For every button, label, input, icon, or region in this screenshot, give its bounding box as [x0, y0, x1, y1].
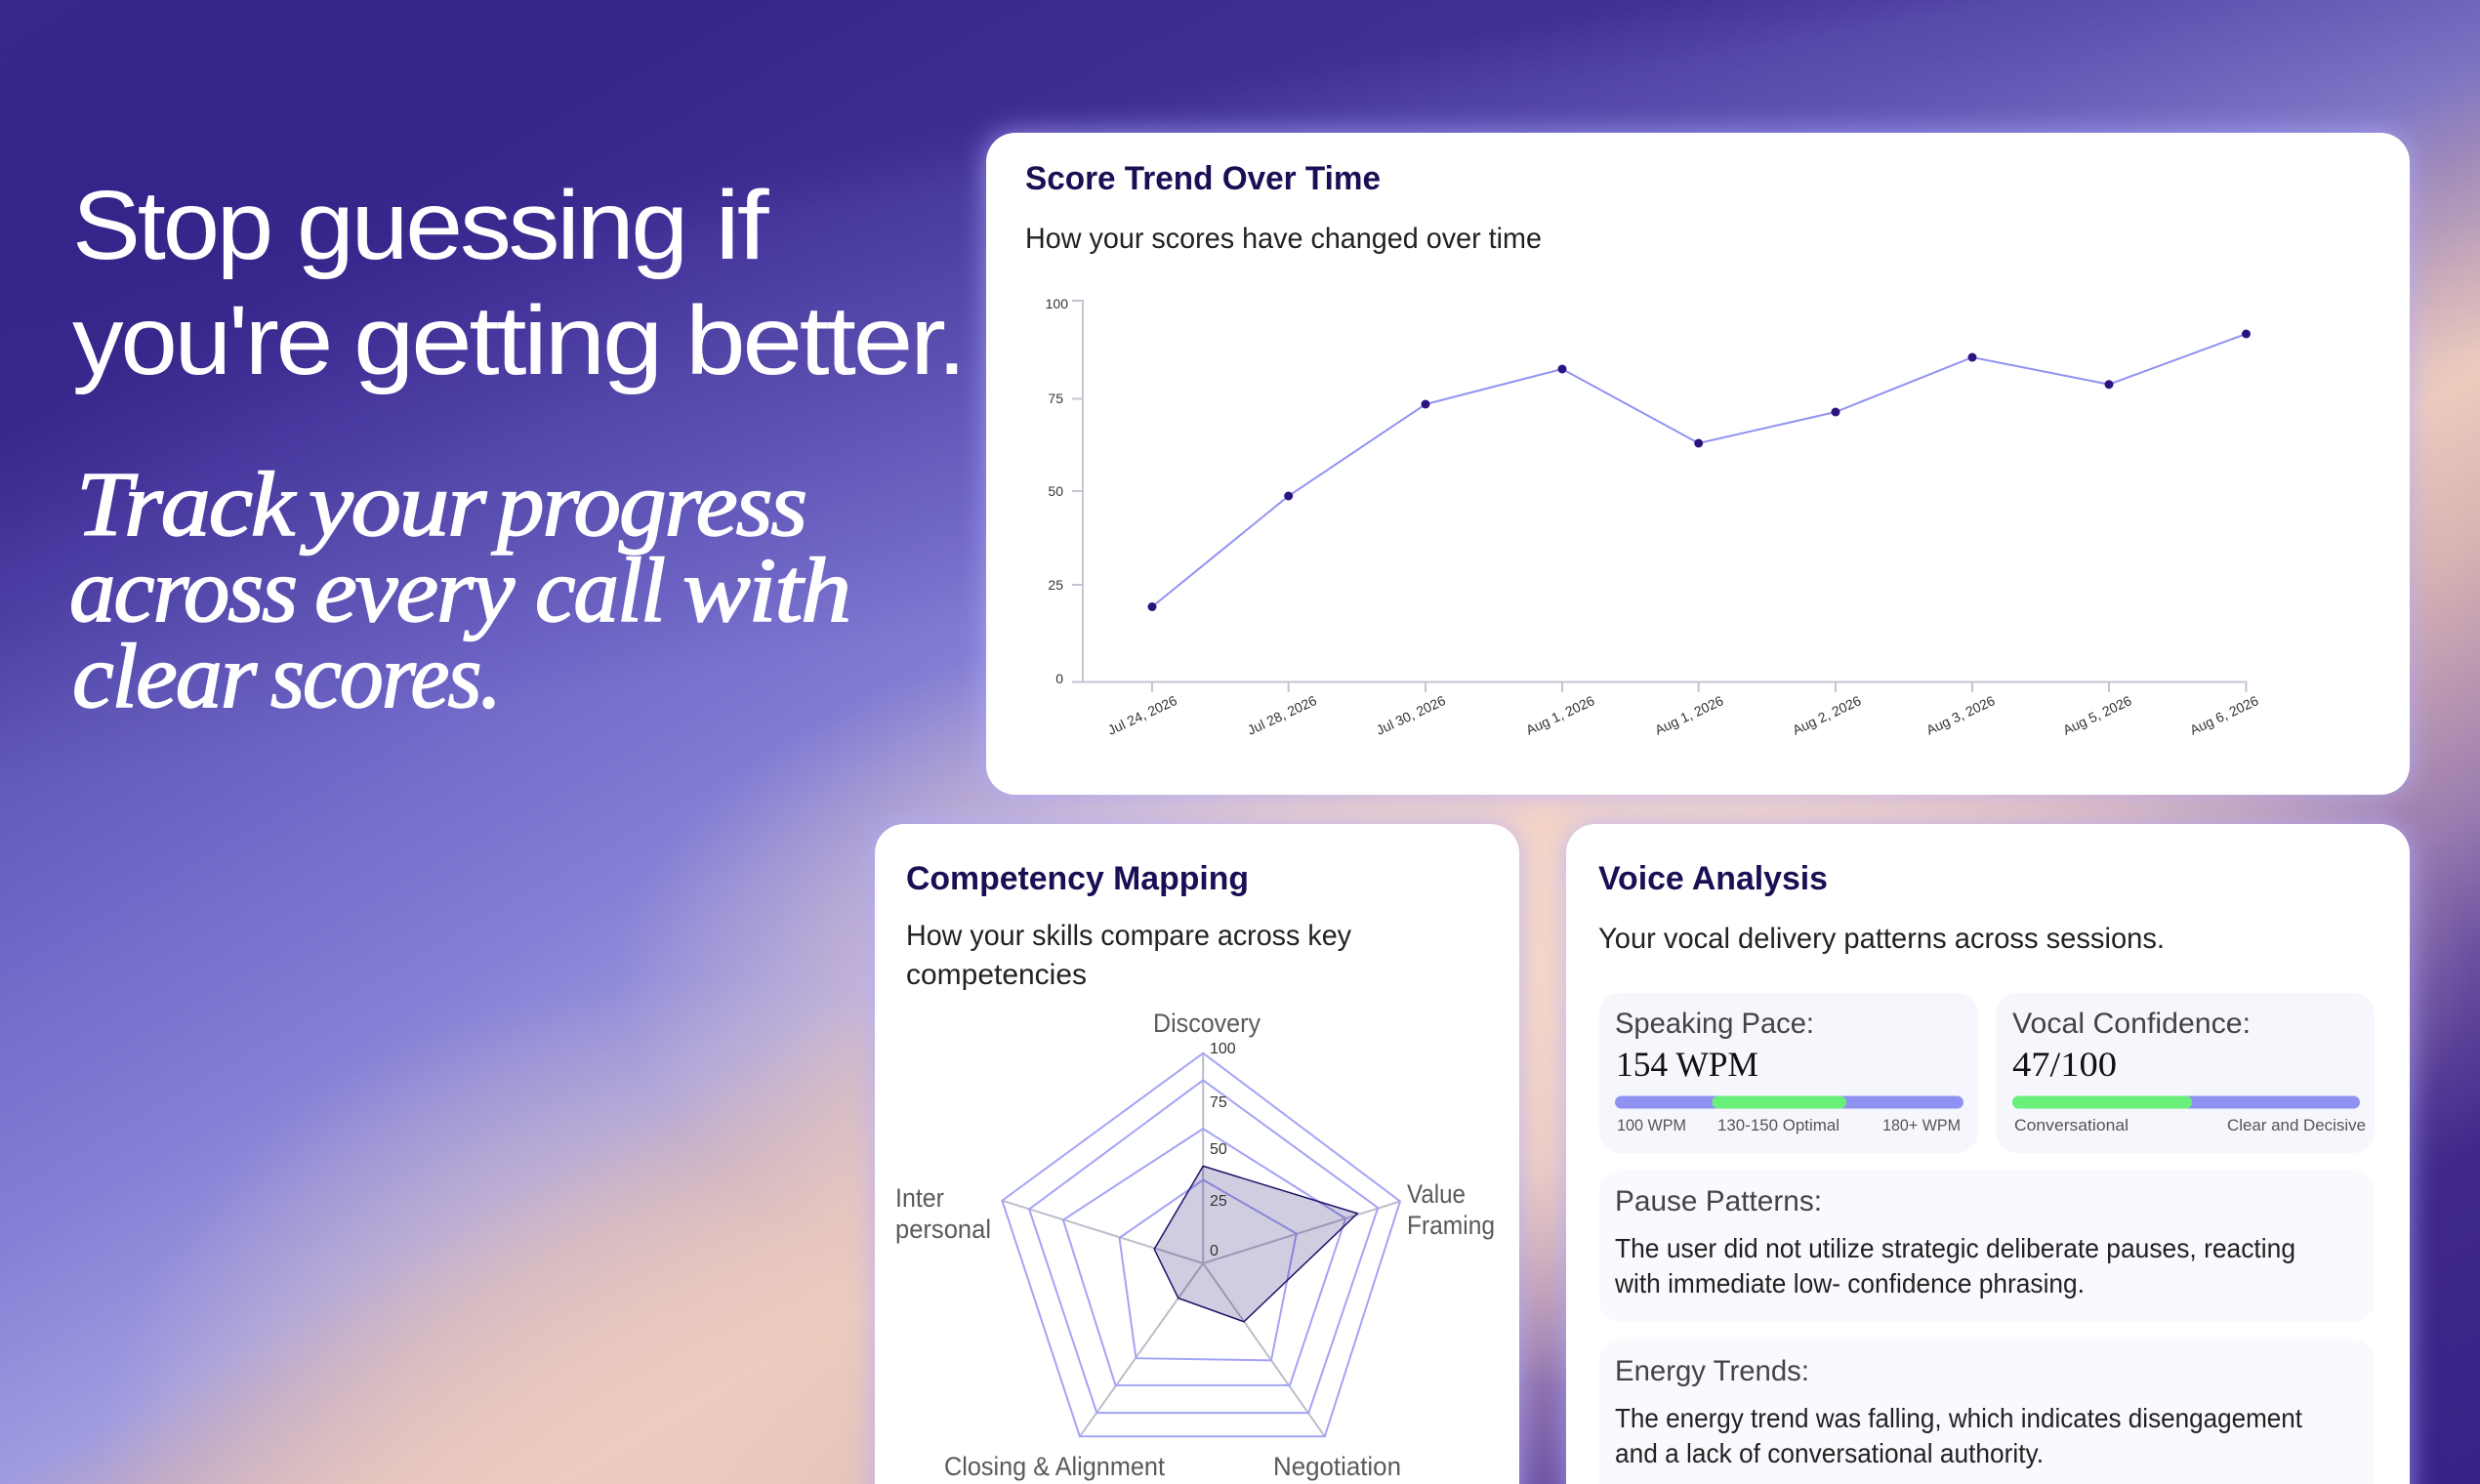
- line chart: Jul 28, 2026: [1245, 692, 1319, 738]
- hero subheading: every: [314, 540, 515, 641]
- energy trends tile: The energy trend was falling, which indicates disengagement: [1615, 1403, 2302, 1433]
- pause patterns tile: with immediate low- confidence phrasing.: [1614, 1268, 2085, 1298]
- hero subheading: [69, 454, 849, 727]
- speaking pace tile: [1599, 993, 1978, 1153]
- radar chart: [895, 1009, 1495, 1481]
- line chart: Aug 3, 2026: [1923, 692, 1998, 738]
- competency heading: Competency Mapping: [906, 860, 1249, 897]
- radar chart: Closing & Alignment: [944, 1452, 1165, 1481]
- score trend heading: Score Trend Over Time: [1025, 160, 1381, 197]
- speaking pace tile: 154 WPM: [1616, 1045, 1758, 1084]
- line chart: 75: [1048, 391, 1063, 406]
- line chart: 25: [1048, 577, 1063, 593]
- line chart: 50: [1048, 483, 1063, 499]
- hero subheading: across: [69, 540, 296, 641]
- panel: competency mapping: [875, 824, 1519, 1484]
- pause patterns tile: [1599, 1171, 2375, 1322]
- energy trends tile: [1599, 1340, 2375, 1484]
- voice heading: Voice Analysis: [1598, 860, 1828, 897]
- speaking pace tile: 100 WPM: [1617, 1116, 1686, 1134]
- line chart: Jul 30, 2026: [1374, 692, 1448, 738]
- radar chart: 25: [1210, 1193, 1227, 1210]
- hero headline: guessing: [297, 171, 685, 280]
- hero subheading: your: [300, 454, 487, 556]
- radar chart: Inter: [895, 1183, 944, 1213]
- hero headline: getting: [353, 286, 660, 395]
- radar chart: Discovery: [1153, 1009, 1261, 1038]
- vocal confidence tile: 47/100: [2012, 1045, 2117, 1084]
- vocal confidence tile: Conversational: [2014, 1116, 2129, 1134]
- hero headline: better.: [685, 286, 964, 395]
- radar chart: 75: [1210, 1094, 1227, 1111]
- score trend subtitle: How your scores have changed over time: [1025, 223, 1542, 255]
- competency subtitle: competencies: [906, 959, 1087, 991]
- hero subheading: scores.: [270, 626, 500, 727]
- line chart: Jul 24, 2026: [1105, 692, 1179, 738]
- hero subheading: with: [682, 540, 849, 641]
- speaking pace tile: 130-150 Optimal: [1717, 1116, 1839, 1134]
- line chart: 0: [1055, 671, 1063, 686]
- hero subheading: progress: [491, 454, 806, 556]
- radar chart: Framing: [1407, 1211, 1495, 1240]
- pause patterns tile: Pause Patterns:: [1615, 1185, 1822, 1217]
- line chart: Aug 1, 2026: [1652, 692, 1726, 738]
- speaking pace tile: Speaking Pace:: [1615, 1008, 1814, 1040]
- voice subtitle: Your vocal delivery patterns across sessions.: [1598, 923, 2165, 955]
- hero headline: Stop: [72, 171, 270, 280]
- line chart: Aug 5, 2026: [2060, 692, 2134, 738]
- radar chart: 100: [1210, 1041, 1236, 1057]
- radar chart: Value: [1407, 1179, 1466, 1209]
- hero headline: if: [715, 171, 769, 280]
- line chart: Aug 2, 2026: [1790, 692, 1864, 738]
- hero headline: [72, 171, 964, 395]
- line chart: 100: [1046, 296, 1068, 311]
- hero subheading: Track: [76, 454, 298, 556]
- energy trends tile: Energy Trends:: [1615, 1355, 1809, 1387]
- vocal confidence tile: [1996, 993, 2375, 1153]
- radar chart: Negotiation: [1273, 1452, 1401, 1481]
- hero subheading: clear: [72, 626, 257, 727]
- pause patterns tile: The user did not utilize strategic deliberate pauses, reacting: [1615, 1233, 2295, 1263]
- line chart: [1046, 296, 2261, 738]
- hero subheading: call: [535, 540, 665, 641]
- competency subtitle: [906, 920, 1351, 991]
- line chart: Aug 6, 2026: [2187, 692, 2261, 738]
- vocal confidence tile: Clear and Decisive: [2227, 1116, 2366, 1134]
- hero headline: you're: [72, 286, 330, 395]
- radar chart: 0: [1210, 1243, 1219, 1259]
- vocal confidence tile: Vocal Confidence:: [2012, 1008, 2251, 1040]
- speaking pace tile: 180+ WPM: [1882, 1116, 1961, 1134]
- competency subtitle: How your skills compare across key: [906, 920, 1351, 952]
- energy trends tile: and a lack of conversational authority.: [1615, 1438, 2044, 1468]
- radar chart: 50: [1210, 1141, 1227, 1158]
- panel: voice analysis: [1566, 824, 2410, 1484]
- line chart: Aug 1, 2026: [1523, 692, 1597, 738]
- panel: score trend: [986, 133, 2410, 795]
- radar chart: personal: [895, 1215, 991, 1244]
